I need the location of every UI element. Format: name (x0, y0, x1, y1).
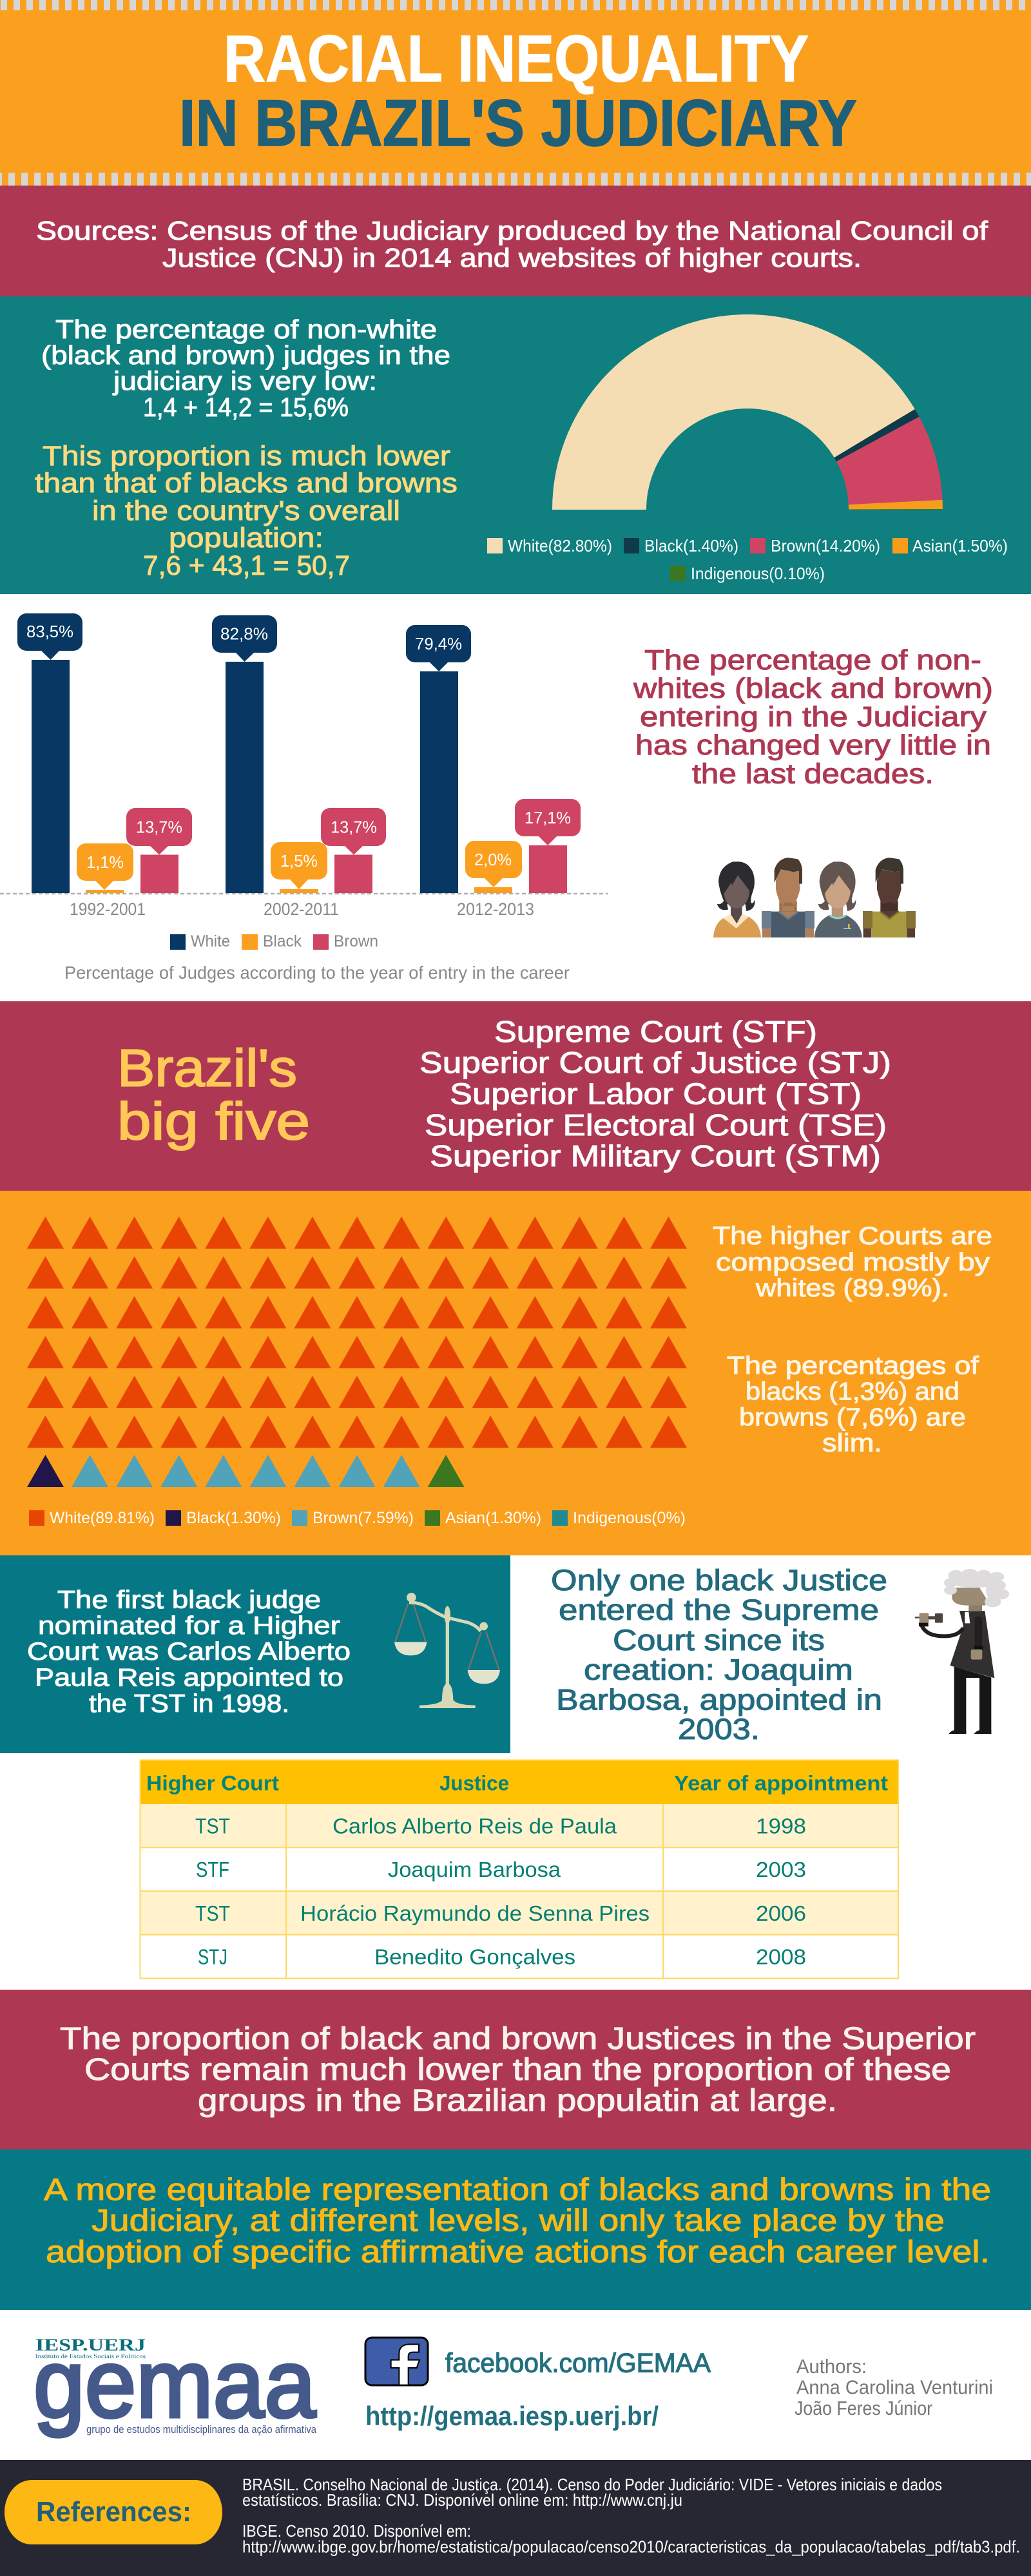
references pill (5, 2480, 222, 2544)
pictogram legend: Asian(1.30%) (445, 1509, 541, 1527)
table rows: STF (196, 1858, 229, 1881)
logo: IESP.UERJ gemaa: grupo de estudos multidisciplinares da ação afirmativa (86, 2423, 316, 2436)
logo: IESP.UERJ gemaa: gemaa (34, 2329, 316, 2437)
sources text: Justice (CNJ) in 2014 and websites of higher courts. (162, 243, 862, 273)
group 2002-2011 (212, 615, 386, 919)
text: entry has changed little: whites (black and brown) (633, 673, 993, 704)
panel: credits (0, 2310, 1031, 2460)
text: slim percentages: The percentages of (727, 1352, 979, 1380)
group 2012-2013: 2012-2013 (457, 899, 534, 919)
donut legend (487, 536, 1008, 583)
panel: entry by decade (0, 594, 1031, 1001)
list of higher courts: Superior Labor Court (TST) (450, 1077, 862, 1111)
text: only one black justice: Court since its (613, 1624, 825, 1657)
text: proportion in overall population: 7,6 + 43,1 = 50,7 (143, 550, 350, 581)
references pill: References: (36, 2496, 191, 2528)
logo: IESP.UERJ gemaa: IESP.UERJ (35, 2336, 146, 2354)
panel: first black judge (0, 1555, 510, 1753)
table of black justices (140, 1760, 898, 1978)
table rows: Horácio Raymundo de Senna Pires (300, 1901, 650, 1925)
table rows: Joaquim Barbosa (388, 1858, 561, 1881)
bar chart legend: Brown (334, 932, 378, 950)
icon: judge with gavel (915, 1569, 1009, 1734)
panel: higher courts composition (0, 1191, 1031, 1555)
proportion text: groups in the Brazilian populatin at large. (198, 2084, 837, 2118)
bar chart legend (170, 932, 378, 950)
text: slim percentages: slim. (822, 1430, 882, 1457)
group 2012-2013: 17,1% (525, 808, 571, 827)
text: first black judge: The first black judge (57, 1586, 321, 1614)
text: only one black justice: 2003. (678, 1713, 760, 1745)
sources text: Sources: Census of the Judiciary produced by the National Council of (36, 216, 988, 245)
panel: only one black justice (551, 1564, 1009, 1745)
text: non-white judges percentage: judiciary is very low: (113, 366, 377, 396)
text: first black judge: the TST in 1998. (89, 1690, 289, 1718)
proportion text: The proportion of black and brown Justices in the Superior (60, 2022, 976, 2056)
person 2 (762, 858, 814, 937)
text: only one black justice: entered the Supreme (559, 1593, 879, 1626)
pictogram legend (29, 1509, 686, 1527)
donut legend: Black(1.40%) (644, 536, 738, 555)
list of higher courts: Supreme Court (STF) (494, 1015, 817, 1048)
reference list: estatísticos. Brasília: CNJ. Disponível online em: http://www.cnj.ju (242, 2490, 682, 2510)
authors: João Feres Júnior (795, 2397, 932, 2419)
person 1 (713, 861, 761, 937)
table rows: Carlos Alberto Reis de Paula (332, 1814, 617, 1838)
text: first black judge (27, 1586, 351, 1718)
table rows: 1998 (756, 1814, 806, 1838)
bar chart (0, 613, 608, 919)
group 1992-2001: 13,7% (136, 818, 182, 837)
title: RACIAL INEQUALITY (224, 22, 809, 95)
person 3 (814, 861, 862, 937)
text: non-white judges percentage: 1,4 + 14,2 = 15,6% (143, 392, 349, 422)
group 1992-2001 (17, 613, 192, 919)
heading: Brazil's big five: Brazil's (117, 1039, 297, 1098)
table header row (146, 1772, 888, 1795)
bar chart legend: Black (263, 932, 302, 950)
bar chart legend: White (191, 932, 230, 950)
chart caption: Percentage of Judges according to the year of entry in the career (64, 963, 570, 983)
reference list: BRASIL. Conselho Nacional de Justiça. (2014). Censo do Poder Judiciário: VIDE - Vetores iniciais e dados (242, 2475, 942, 2494)
donut legend: Brown(14.20%) (771, 536, 880, 555)
table rows: Benedito Gonçalves (374, 1945, 575, 1969)
group 1992-2001: 83,5% (26, 622, 73, 641)
facebook link: facebook.com/GEMAA (445, 2348, 711, 2378)
panel: proportion statement (0, 1990, 1031, 2149)
panel: sources (0, 186, 1031, 296)
text: only one black justice: creation: Joaquim (584, 1653, 853, 1686)
list of higher courts: Superior Military Court (STM) (430, 1139, 881, 1173)
title (179, 22, 857, 160)
group 2002-2011: 1,5% (280, 851, 318, 870)
panel: Brazil's big five (0, 1001, 1031, 1191)
person 4 (863, 858, 916, 937)
group 2002-2011: 13,7% (331, 818, 377, 837)
conclusion text: Judiciary, at different levels, will only take place by the (92, 2204, 945, 2238)
heading: Brazil's big five (117, 1039, 310, 1151)
table header row: Justice (439, 1772, 509, 1795)
icon: facebook (365, 2338, 428, 2385)
semi-donut chart (552, 314, 943, 510)
authors (795, 2355, 993, 2419)
text: proportion in overall population: than that of blacks and browns (35, 468, 458, 499)
text: first black judge: Court was Carlos Alberto (27, 1638, 351, 1666)
group 2012-2013: 79,4% (415, 634, 462, 653)
text: proportion in overall population: This proportion is much lower (43, 441, 450, 472)
table rows: TST (195, 1901, 230, 1925)
pictogram legend: Black(1.30%) (186, 1509, 281, 1527)
icon: four people (713, 858, 916, 937)
donut legend: Asian(1.50%) (912, 536, 1008, 555)
group 2012-2013 (406, 625, 581, 919)
table rows: 2008 (756, 1945, 806, 1969)
list of higher courts (419, 1015, 891, 1173)
text: slim percentages: blacks (1,3%) and (746, 1378, 959, 1406)
reference list: IBGE. Censo 2010. Disponível em: (242, 2521, 471, 2541)
reference list (242, 2475, 1020, 2557)
pictogram legend: White(89.81%) (50, 1509, 155, 1527)
list of higher courts: Superior Electoral Court (TSE) (425, 1108, 887, 1142)
text: entry has changed little: the last decades. (692, 758, 934, 790)
list of higher courts: Superior Court of Justice (STJ) (419, 1046, 891, 1079)
text: only one black justice (551, 1564, 887, 1745)
group 2002-2011: 2002-2011 (264, 899, 339, 919)
pictogram legend: Indigenous(0%) (573, 1509, 686, 1527)
group 1992-2001: 1992-2001 (70, 899, 146, 919)
triangle pictogram chart (27, 1216, 695, 1487)
text: first black judge: nominated for a Higher (38, 1612, 340, 1640)
proportion text (60, 2022, 976, 2118)
title: IN BRAZIL'S JUDICIARY (179, 86, 857, 160)
table rows: 2003 (756, 1858, 806, 1881)
panel: judges by race donut (0, 296, 1031, 594)
text: only one black justice: Barbosa, appointed in (556, 1684, 882, 1716)
table rows: TST (195, 1814, 230, 1838)
text: proportion in overall population: population: (169, 523, 323, 553)
conclusion text: A more equitable representation of blacks and browns in the (44, 2173, 991, 2207)
icon: scales of justice (394, 1593, 500, 1708)
table header row: Higher Court (146, 1772, 279, 1795)
table header row: Year of appointment (674, 1772, 888, 1795)
text: non-white judges percentage: The percentage of non-white (55, 314, 437, 344)
text: mostly whites: The higher Courts are (713, 1222, 992, 1250)
text: entry has changed little (633, 644, 993, 790)
sources text (36, 216, 988, 273)
logo: IESP.UERJ gemaa: Instituto de Estudos Sociais e Políticos (35, 2353, 146, 2360)
group 2012-2013: 2,0% (474, 850, 512, 869)
text: only one black justice: Only one black Justice (551, 1564, 887, 1597)
conclusion text (44, 2173, 991, 2269)
table rows (195, 1814, 806, 1969)
group 2002-2011: 82,8% (220, 624, 268, 644)
authors: Authors: (796, 2355, 867, 2378)
text: proportion in overall population (35, 441, 458, 581)
pictogram legend: Brown(7.59%) (313, 1509, 414, 1527)
text: slim percentages: browns (7,6%) are (739, 1404, 966, 1432)
authors: Anna Carolina Venturini (796, 2376, 993, 2399)
panel: references (0, 2460, 1031, 2576)
text: slim percentages (727, 1352, 979, 1457)
text: entry has changed little: has changed very little in (635, 729, 991, 761)
text: first black judge: Paula Reis appointed to (35, 1664, 343, 1692)
heading: Brazil's big five: big five (117, 1092, 310, 1151)
text: entry has changed little: The percentage of non- (644, 644, 981, 676)
donut legend: White(82.80%) (508, 536, 612, 555)
text: mostly whites: whites (89.9%). (755, 1274, 949, 1302)
panel: affirmative action conclusion (0, 2149, 1031, 2310)
donut legend: Indigenous(0.10%) (691, 564, 825, 583)
conclusion text: adoption of specific affirmative actions for each career level. (46, 2235, 990, 2269)
text: entry has changed little: entering in the Judiciary (640, 701, 987, 733)
group 1992-2001: 1,1% (86, 852, 124, 872)
panel: title header (0, 0, 1031, 186)
table rows: 2006 (756, 1901, 806, 1925)
website link: http://gemaa.iesp.uerj.br/ (365, 2401, 659, 2431)
text: non-white judges percentage: (black and brown) judges in the (41, 340, 450, 370)
text: mostly whites (713, 1222, 992, 1302)
text: proportion in overall population: in the country's overall (92, 495, 400, 526)
proportion text: Courts remain much lower than the proportion of these (84, 2053, 951, 2087)
text: mostly whites: composed mostly by (716, 1249, 990, 1276)
table rows: STJ (198, 1945, 227, 1969)
text: non-white judges percentage (41, 314, 450, 422)
